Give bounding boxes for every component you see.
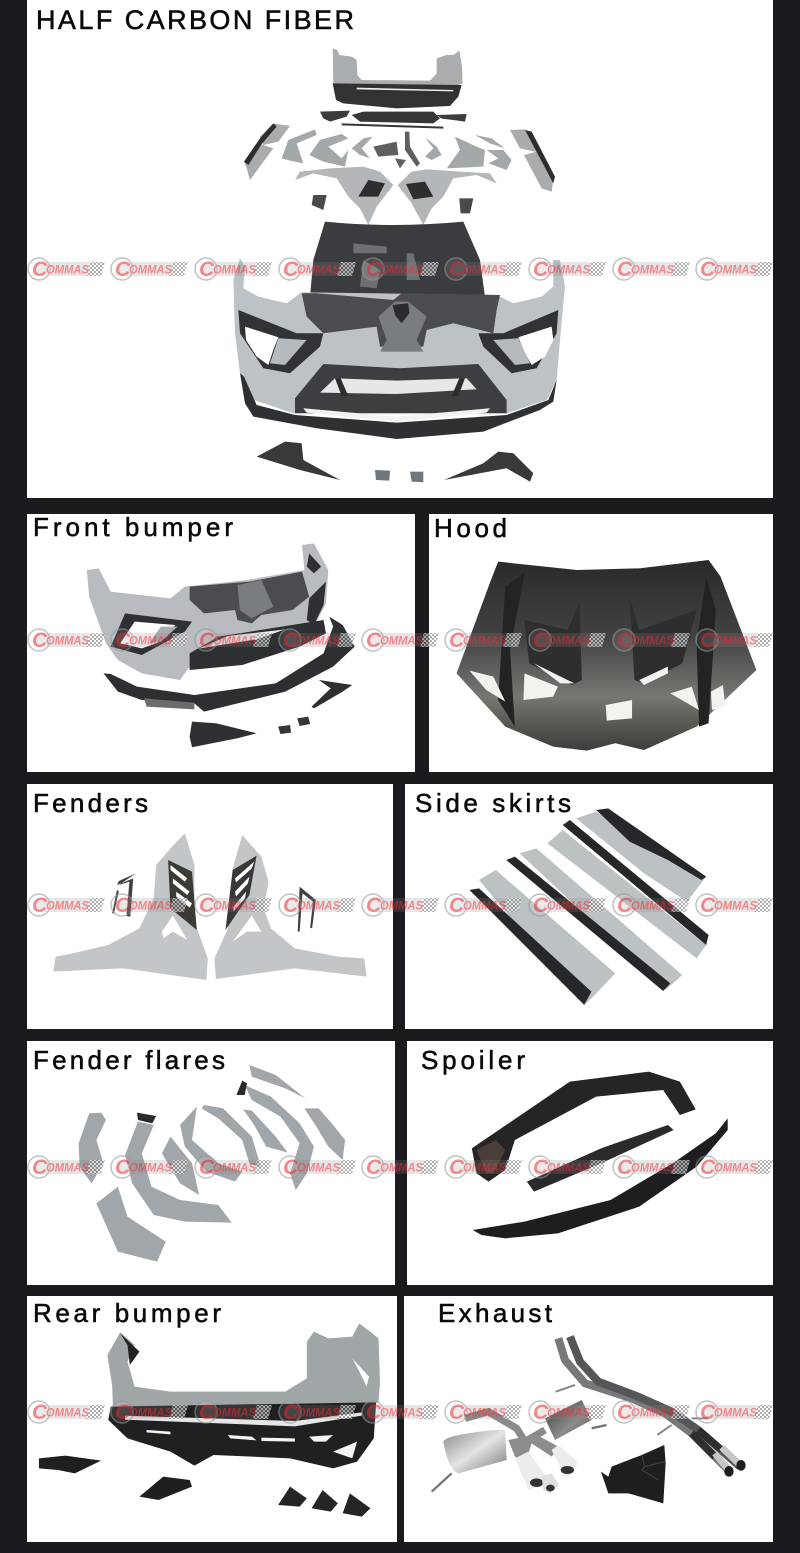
panel: side skirts xyxy=(405,784,773,1029)
watermarks: fenders and skirts row: C xyxy=(32,894,48,917)
heading: fender flares: Fender flares xyxy=(33,1045,225,1075)
watermarks: rear bumper and exhaust row: C xyxy=(449,1401,465,1424)
watermarks: fenders and skirts row xyxy=(28,894,773,917)
watermarks: rear bumper and exhaust row: OMMAS xyxy=(631,1406,674,1420)
watermarks: fenders and skirts row: OMMAS xyxy=(547,898,590,912)
spoiler pieces xyxy=(472,1072,728,1238)
watermarks: flares and spoiler row: C xyxy=(366,1156,382,1179)
watermarks: overview row: C xyxy=(617,258,633,281)
watermarks: fenders and skirts row: C xyxy=(533,894,549,917)
watermarks: fenders and skirts row: OMMAS xyxy=(380,898,423,912)
watermarks: fenders and skirts row: C xyxy=(449,894,465,917)
carbon hood xyxy=(457,560,756,751)
watermarks: overview row: OMMAS xyxy=(46,262,89,276)
watermarks: rear bumper and exhaust row: C xyxy=(700,1401,716,1424)
watermarks: flares and spoiler row: OMMAS xyxy=(297,1160,340,1174)
heading: hood: Hood xyxy=(434,513,507,543)
watermarks: overview row: C xyxy=(449,258,465,281)
panel: front bumper xyxy=(27,512,415,772)
watermarks: flares and spoiler row: OMMAS xyxy=(631,1160,674,1174)
watermarks: rear bumper and exhaust row: C xyxy=(617,1401,633,1424)
watermarks: bumper and hood row: OMMAS xyxy=(714,634,757,648)
heading: front bumper: Front bumper xyxy=(33,512,233,542)
watermarks: overview row: OMMAS xyxy=(297,262,340,276)
watermarks: overview row: C xyxy=(115,258,131,281)
heading: spoiler: Spoiler xyxy=(421,1045,525,1075)
watermarks: fenders and skirts row: OMMAS xyxy=(46,898,89,912)
watermarks: flares and spoiler row: OMMAS xyxy=(547,1160,590,1174)
heading: fenders: Fenders xyxy=(33,788,148,818)
pair of fenders xyxy=(53,833,367,980)
watermarks: bumper and hood row: C xyxy=(700,629,716,652)
watermarks: overview row: C xyxy=(199,258,215,281)
watermarks: bumper and hood row: C xyxy=(449,629,465,652)
watermarks: rear bumper and exhaust row: C xyxy=(283,1401,299,1424)
watermarks: fenders and skirts row: OMMAS xyxy=(463,898,506,912)
watermarks: overview row: OMMAS xyxy=(547,262,590,276)
panel: hood xyxy=(429,513,773,772)
watermarks: overview row: OMMAS xyxy=(213,262,256,276)
panel: spoiler xyxy=(407,1041,773,1285)
watermarks: overview row: OMMAS xyxy=(631,262,674,276)
front bumper parts xyxy=(87,543,355,747)
watermarks: rear bumper and exhaust row: C xyxy=(366,1401,382,1424)
watermarks: rear bumper and exhaust row: C xyxy=(32,1401,48,1424)
heading: side skirts: Side skirts xyxy=(415,788,571,818)
watermarks: overview row: OMMAS xyxy=(380,262,423,276)
panel: fender flares xyxy=(27,1041,395,1285)
watermarks: bumper and hood row: OMMAS xyxy=(547,634,590,648)
watermarks: bumper and hood row xyxy=(28,629,773,652)
panel: rear bumper xyxy=(27,1296,397,1542)
watermarks: fenders and skirts row: C xyxy=(617,894,633,917)
watermarks: rear bumper and exhaust row: OMMAS xyxy=(714,1406,757,1420)
watermarks: overview row xyxy=(28,258,773,281)
watermarks: overview row: OMMAS xyxy=(714,262,757,276)
watermarks: flares and spoiler row: OMMAS xyxy=(213,1160,256,1174)
heading: exhaust: Exhaust xyxy=(438,1298,553,1328)
watermarks: bumper and hood row: OMMAS xyxy=(46,634,89,648)
watermarks: bumper and hood row: C xyxy=(283,629,299,652)
watermarks: bumper and hood row: C xyxy=(533,629,549,652)
watermarks: flares and spoiler row: C xyxy=(617,1156,633,1179)
panel: half carbon fiber overview xyxy=(27,0,773,498)
watermarks: rear bumper and exhaust row: C xyxy=(199,1401,215,1424)
watermarks: rear bumper and exhaust row: C xyxy=(533,1401,549,1424)
watermarks: overview row: OMMAS xyxy=(129,262,172,276)
watermarks: bumper and hood row: C xyxy=(617,629,633,652)
watermarks: flares and spoiler row: OMMAS xyxy=(46,1160,89,1174)
watermarks: rear bumper and exhaust row: OMMAS xyxy=(547,1406,590,1420)
watermarks: bumper and hood row: OMMAS xyxy=(631,634,674,648)
watermarks: flares and spoiler row: C xyxy=(283,1156,299,1179)
heading: rear bumper: Rear bumper xyxy=(33,1298,221,1328)
watermarks: fenders and skirts row: C xyxy=(115,894,131,917)
watermarks: bumper and hood row: OMMAS xyxy=(129,634,172,648)
watermarks: overview row: C xyxy=(366,258,382,281)
watermarks: rear bumper and exhaust row: OMMAS xyxy=(380,1406,423,1420)
watermarks: flares and spoiler row: OMMAS xyxy=(714,1160,757,1174)
panel: exhaust xyxy=(404,1296,773,1542)
watermarks: fenders and skirts row: OMMAS xyxy=(631,898,674,912)
watermarks: bumper and hood row: C xyxy=(115,629,131,652)
watermarks: bumper and hood row: OMMAS xyxy=(297,634,340,648)
watermarks: bumper and hood row: OMMAS xyxy=(213,634,256,648)
watermarks: bumper and hood row: C xyxy=(366,629,382,652)
rear bumper parts xyxy=(39,1323,380,1517)
watermarks: flares and spoiler row xyxy=(28,1156,773,1179)
full kit exploded view xyxy=(233,48,565,482)
watermarks: rear bumper and exhaust row: OMMAS xyxy=(46,1406,89,1420)
watermarks: fenders and skirts row: C xyxy=(199,894,215,917)
watermarks: fenders and skirts row: OMMAS xyxy=(297,898,340,912)
watermarks: rear bumper and exhaust row: OMMAS xyxy=(129,1406,172,1420)
watermarks: bumper and hood row: OMMAS xyxy=(463,634,506,648)
watermarks: fenders and skirts row: C xyxy=(283,894,299,917)
watermarks: overview row: C xyxy=(32,258,48,281)
watermarks: flares and spoiler row: C xyxy=(700,1156,716,1179)
watermarks: rear bumper and exhaust row: OMMAS xyxy=(463,1406,506,1420)
watermarks: flares and spoiler row: OMMAS xyxy=(380,1160,423,1174)
watermarks: rear bumper and exhaust row: OMMAS xyxy=(213,1406,256,1420)
watermarks: flares and spoiler row: C xyxy=(32,1156,48,1179)
watermarks: flares and spoiler row: C xyxy=(199,1156,215,1179)
watermarks: fenders and skirts row: C xyxy=(366,894,382,917)
watermarks: fenders and skirts row: OMMAS xyxy=(714,898,757,912)
watermarks: overview row: C xyxy=(700,258,716,281)
watermarks: rear bumper and exhaust row xyxy=(28,1401,773,1424)
watermarks: fenders and skirts row: OMMAS xyxy=(129,898,172,912)
watermarks: flares and spoiler row: OMMAS xyxy=(463,1160,506,1174)
watermarks: bumper and hood row: C xyxy=(199,629,215,652)
watermarks: fenders and skirts row: C xyxy=(700,894,716,917)
watermarks: overview row: C xyxy=(283,258,299,281)
watermarks: flares and spoiler row: OMMAS xyxy=(129,1160,172,1174)
watermarks: flares and spoiler row: C xyxy=(115,1156,131,1179)
panel: fenders xyxy=(27,784,393,1029)
flare pieces xyxy=(79,1065,345,1262)
watermarks: flares and spoiler row: C xyxy=(533,1156,549,1179)
watermarks: rear bumper and exhaust row: OMMAS xyxy=(297,1406,340,1420)
watermarks: rear bumper and exhaust row: C xyxy=(115,1401,131,1424)
watermarks: overview row: C xyxy=(533,258,549,281)
exhaust system xyxy=(432,1337,746,1503)
watermarks: bumper and hood row: C xyxy=(32,629,48,652)
four side skirts xyxy=(469,808,709,1005)
watermarks: fenders and skirts row: OMMAS xyxy=(213,898,256,912)
heading: half carbon fiber: HALF CARBON FIBER xyxy=(36,5,354,35)
watermarks: flares and spoiler row: C xyxy=(449,1156,465,1179)
watermarks: overview row: OMMAS xyxy=(463,262,506,276)
watermarks: bumper and hood row: OMMAS xyxy=(380,634,423,648)
